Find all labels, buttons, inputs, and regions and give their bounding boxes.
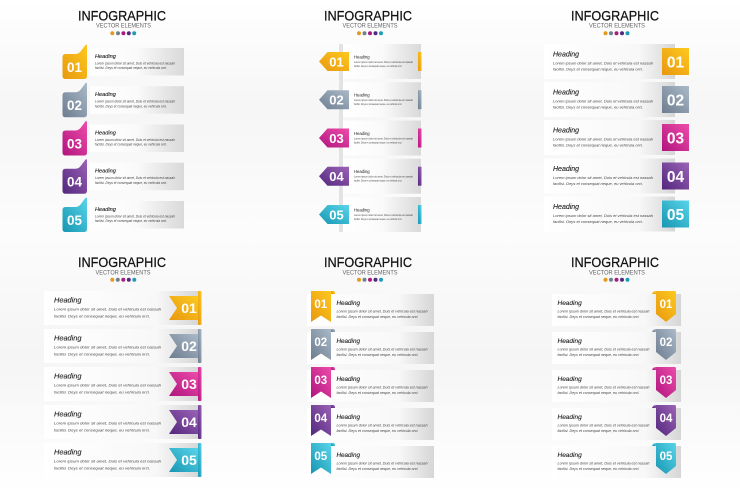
body text: Lorem ipsum dolor sit amet, Duis et vehicula est nassah [54, 422, 161, 426]
colour dots [357, 31, 383, 35]
body text: facilisi. Deys et consequat neque, eu vehicula orci. [354, 64, 402, 68]
panel: top-centre infographic, arrow badges [319, 8, 422, 232]
body text [54, 384, 161, 394]
badge 04: 04 [329, 169, 344, 184]
bookmark badge 02: 02 [314, 337, 327, 349]
body text: facilisi. Deys et consequat neque, eu vehicula orci. [95, 219, 167, 223]
panel: bottom-left infographic, side ribbons [44, 254, 202, 477]
badge 04: 04 [667, 169, 684, 186]
body text: facilisi. Deys et consequat neque, eu vehicula orci. [54, 428, 150, 432]
title: INFOGRAPHIC [571, 254, 659, 270]
badge 01: 01 [667, 54, 684, 72]
heading: Heading [336, 376, 360, 383]
row 02 [62, 83, 184, 117]
subtitle: VECTOR ELEMENTS [96, 270, 150, 276]
body text [558, 309, 650, 319]
heading: Heading [553, 166, 579, 173]
body text: facilisi. Deys et consequat neque, eu vehicula orci. [54, 466, 150, 470]
body text: facilisi. Deys et consequat neque, eu vehicula orci. [336, 429, 419, 433]
heading: Heading [354, 169, 370, 174]
body text [95, 62, 175, 70]
body text: facilisi. Deys et consequat neque, eu vehicula orci. [558, 315, 640, 319]
row 04 [319, 159, 422, 194]
body text: Lorem ipsum dolor sit amet, Duis et vehicula est nassah [54, 346, 161, 350]
body text: Lorem ipsum dolor sit amet, Duis et vehicula est nassah [54, 384, 161, 388]
subtitle: VECTOR ELEMENTS [342, 22, 398, 30]
badge 01 [662, 48, 689, 75]
body text: Lorem ipsum dolor sit amet, Duis et vehicula est nassah [558, 385, 650, 389]
title: INFOGRAPHIC [324, 254, 412, 270]
body text [336, 461, 428, 471]
panel: top-left infographic, speech-tab badges [62, 8, 184, 232]
heading: Heading [558, 376, 582, 383]
title: INFOGRAPHIC [78, 254, 166, 270]
tag badge 02: 02 [660, 337, 672, 349]
body text: Lorem ipsum dolor sit amet, Duis et vehicula est nassah [336, 461, 428, 465]
heading: Heading [336, 300, 360, 307]
row 04 [552, 405, 681, 440]
body text: Lorem ipsum dolor sit amet, Duis et vehicula est nassah [95, 100, 175, 104]
body text: Lorem ipsum dolor sit amet, Duis et vehicula est nassah [558, 423, 650, 427]
row 01 [62, 44, 184, 79]
row 05 [44, 443, 202, 477]
colour dots [357, 278, 383, 282]
badge 03: 03 [667, 130, 684, 148]
row 01 [544, 44, 689, 79]
body text [553, 138, 653, 148]
row 03 [307, 367, 434, 402]
subtitle: VECTOR ELEMENTS [96, 22, 151, 30]
row 03 [544, 120, 689, 155]
body text [54, 308, 161, 318]
body text [336, 309, 428, 319]
body text [336, 347, 428, 357]
heading: Heading [553, 204, 579, 211]
body text: facilisi. Deys et consequat neque, eu vehicula orci. [336, 391, 419, 395]
body text: Lorem ipsum dolor sit amet, Duis et vehicula est nassah [54, 460, 161, 464]
badge 05: 05 [67, 213, 82, 228]
body text: facilisi. Deys et consequat neque, eu vehicula orci. [336, 467, 419, 471]
body text [553, 176, 653, 186]
row 01 [44, 291, 202, 325]
body text: facilisi. Deys et consequat neque, eu vehicula orci. [558, 391, 640, 395]
row 05 [544, 196, 689, 232]
body text: Lorem ipsum dolor sit amet, Duis et vehicula est nassah [54, 308, 161, 312]
body text [95, 100, 175, 108]
body text [95, 214, 175, 223]
tag badge 03: 03 [660, 375, 672, 387]
heading: Heading [95, 169, 117, 175]
body text [553, 62, 653, 72]
row 04 [544, 158, 689, 194]
subtitle: VECTOR ELEMENTS [589, 270, 645, 276]
title: INFOGRAPHIC [571, 8, 659, 24]
bookmark badge 01: 01 [314, 299, 328, 311]
ribbon badge 04: 04 [181, 414, 197, 430]
row 02 [544, 82, 689, 117]
badge 03: 03 [329, 131, 344, 146]
body text: Lorem ipsum dolor sit amet, Duis et vehicula est nassah [558, 309, 650, 313]
body text: Lorem ipsum dolor sit amet, Duis et vehicula est nassah [336, 347, 428, 351]
tag badge 05: 05 [660, 451, 673, 463]
row 01 [319, 44, 422, 79]
heading: Heading [336, 338, 360, 345]
badge 02: 02 [67, 98, 82, 113]
heading: Heading [558, 338, 582, 345]
row 04 [307, 405, 434, 440]
body text [553, 100, 653, 110]
row 02 [44, 329, 202, 363]
heading: Heading [354, 208, 370, 212]
row 02 [552, 329, 681, 364]
heading: Heading [354, 131, 370, 136]
heading: Heading [558, 300, 582, 307]
badge 02: 02 [667, 92, 684, 110]
body text: facilisi. Deys et consequat neque, eu vehicula orci. [558, 467, 640, 471]
body text [558, 347, 650, 357]
heading: Heading [336, 414, 360, 421]
body text: Lorem ipsum dolor sit amet, Duis et vehicula est nassah [553, 138, 653, 142]
body text [558, 423, 650, 433]
body text: Lorem ipsum dolor sit amet, Duis et vehicula est nassah [558, 461, 650, 465]
body text [354, 174, 413, 183]
row 02 [307, 329, 434, 364]
bookmark badge 04: 04 [314, 413, 328, 425]
body text: facilisi. Deys et consequat neque, eu vehicula orci. [95, 104, 167, 108]
row 05 [62, 197, 184, 232]
subtitle: VECTOR ELEMENTS [589, 22, 645, 30]
body text: facilisi. Deys et consequat neque, eu vehicula orci. [54, 314, 150, 318]
badge 02: 02 [329, 93, 344, 108]
subtitle: VECTOR ELEMENTS [342, 270, 398, 276]
row 03 [62, 121, 184, 156]
colour dots [604, 278, 630, 282]
row 01 [307, 291, 434, 326]
body text: Lorem ipsum dolor sit amet, Duis et vehicula est nassah [336, 385, 428, 389]
badge 01: 01 [329, 54, 344, 70]
colour dots [604, 31, 630, 35]
bookmark badge 05: 05 [314, 451, 328, 463]
body text: facilisi. Deys et consequat neque, eu vehicula orci. [336, 315, 419, 319]
heading: Heading [54, 334, 82, 342]
body text [354, 60, 413, 68]
ribbon badge 05 [169, 443, 202, 477]
body text: Lorem ipsum dolor sit amet, Duis et vehicula est nassah [553, 176, 653, 180]
colour dots [110, 278, 136, 282]
body text: facilisi. Deys et consequat neque, eu vehicula orci. [336, 353, 419, 357]
row 05 [307, 443, 434, 478]
badge 05: 05 [329, 208, 344, 222]
heading: Heading [354, 54, 370, 60]
body text: facilisi. Deys et consequat neque, eu vehicula orci. [354, 217, 402, 221]
heading: Heading [54, 296, 82, 304]
panel: bottom-right infographic, pointed tag badges [552, 254, 681, 478]
bookmark badge 03: 03 [314, 375, 327, 387]
body text: Lorem ipsum dolor sit amet, Duis et vehicula est nassah [95, 138, 175, 142]
badge 02 [662, 86, 689, 113]
badge 05 [662, 200, 689, 228]
panel: bottom-centre infographic, bookmark badges [307, 254, 434, 478]
body text: facilisi. Deys et consequat neque, eu vehicula orci. [95, 143, 167, 147]
heading: Heading [336, 452, 360, 459]
ribbon badge 02: 02 [181, 338, 197, 354]
row 02 [319, 82, 422, 117]
heading: Heading [553, 90, 579, 96]
body text: Lorem ipsum dolor sit amet, Duis et vehicula est nassah [336, 423, 428, 427]
heading: Heading [558, 452, 582, 459]
body text: facilisi. Deys et consequat neque, eu vehicula orci. [553, 106, 643, 110]
title: INFOGRAPHIC [78, 8, 166, 24]
body text: Lorem ipsum dolor sit amet, Duis et vehicula est nassah [553, 100, 653, 104]
row 04 [44, 405, 202, 439]
heading: Heading [95, 130, 117, 136]
body text: facilisi. Deys et consequat neque, eu vehicula orci. [54, 390, 150, 394]
body text [95, 176, 175, 185]
badge 04 [662, 162, 689, 190]
body text [354, 213, 413, 221]
panel: top-right infographic, square badges [544, 8, 689, 232]
heading: Heading [54, 372, 82, 380]
badge 04: 04 [67, 175, 82, 190]
tag badge 04: 04 [660, 413, 673, 425]
ribbon badge 02 [169, 329, 202, 363]
body text: facilisi. Deys et consequat neque, eu vehicula orci. [553, 182, 643, 186]
body text: facilisi. Deys et consequat neque, eu vehicula orci. [354, 140, 402, 144]
ribbon badge 04 [169, 405, 202, 439]
badge 03: 03 [67, 136, 82, 152]
body text: facilisi. Deys et consequat neque, eu vehicula orci. [354, 179, 402, 183]
body text: facilisi. Deys et consequat neque, eu vehicula orci. [95, 66, 167, 70]
row 05 [319, 197, 422, 232]
body text: Lorem ipsum dolor sit amet, Duis et vehicula est nassah [354, 213, 413, 217]
badge 05: 05 [667, 207, 684, 224]
heading: Heading [553, 128, 579, 134]
row 01 [552, 291, 681, 326]
body text [54, 460, 161, 470]
row 04 [62, 159, 184, 194]
body text [354, 98, 413, 106]
body text: Lorem ipsum dolor sit amet, Duis et vehicula est nassah [95, 214, 175, 218]
body text: facilisi. Deys et consequat neque, eu vehicula orci. [354, 102, 402, 106]
ribbon badge 01: 01 [181, 300, 197, 316]
body text [336, 385, 428, 395]
body text [95, 138, 175, 147]
title: INFOGRAPHIC [324, 8, 412, 24]
body text [354, 136, 413, 144]
body text: Lorem ipsum dolor sit amet, Duis et vehicula est nassah [354, 174, 413, 178]
body text [54, 422, 161, 432]
row 03 [319, 120, 422, 156]
body text: Lorem ipsum dolor sit amet, Duis et vehicula est nassah [336, 309, 428, 313]
heading: Heading [553, 52, 579, 58]
body text: Lorem ipsum dolor sit amet, Duis et vehicula est nassah [354, 60, 413, 64]
body text: facilisi. Deys et consequat neque, eu vehicula orci. [553, 144, 643, 148]
body text: facilisi. Deys et consequat neque, eu vehicula orci. [558, 429, 640, 433]
ribbon badge 03 [169, 367, 202, 401]
body text [553, 214, 653, 224]
badge 01: 01 [67, 60, 82, 75]
body text [336, 423, 428, 433]
heading: Heading [54, 410, 82, 418]
heading: Heading [558, 414, 582, 421]
row 05 [552, 443, 681, 478]
body text [54, 346, 161, 356]
body text: facilisi. Deys et consequat neque, eu vehicula orci. [558, 353, 640, 357]
colour dots [110, 31, 136, 35]
row 03 [552, 367, 681, 402]
body text: facilisi. Deys et consequat neque, eu vehicula orci. [553, 68, 643, 72]
body text [558, 461, 650, 471]
heading: Heading [354, 93, 370, 98]
body text: Lorem ipsum dolor sit amet, Duis et vehicula est nassah [95, 176, 175, 180]
body text: facilisi. Deys et consequat neque, eu vehicula orci. [54, 352, 150, 356]
heading: Heading [54, 448, 82, 456]
body text: Lorem ipsum dolor sit amet, Duis et vehicula est nassah [95, 62, 175, 66]
body text: Lorem ipsum dolor sit amet, Duis et vehicula est nassah [354, 136, 413, 140]
badge 03 [662, 124, 689, 151]
ribbon badge 01 [169, 291, 202, 325]
ribbon badge 03: 03 [181, 376, 197, 392]
body text: Lorem ipsum dolor sit amet, Duis et vehicula est nassah [553, 214, 653, 218]
row 03 [44, 367, 202, 401]
heading: Heading [95, 92, 117, 98]
ribbon badge 05: 05 [181, 452, 197, 468]
body text [558, 385, 650, 395]
body text: facilisi. Deys et consequat neque, eu vehicula orci. [553, 220, 643, 224]
body text: facilisi. Deys et consequat neque, eu vehicula orci. [95, 181, 167, 185]
heading: Heading [95, 54, 117, 60]
body text: Lorem ipsum dolor sit amet, Duis et vehicula est nassah [558, 347, 650, 351]
body text: Lorem ipsum dolor sit amet, Duis et vehicula est nassah [354, 98, 413, 102]
body text: Lorem ipsum dolor sit amet, Duis et vehicula est nassah [553, 62, 653, 66]
tag badge 01: 01 [660, 299, 673, 311]
heading: Heading [95, 207, 117, 213]
